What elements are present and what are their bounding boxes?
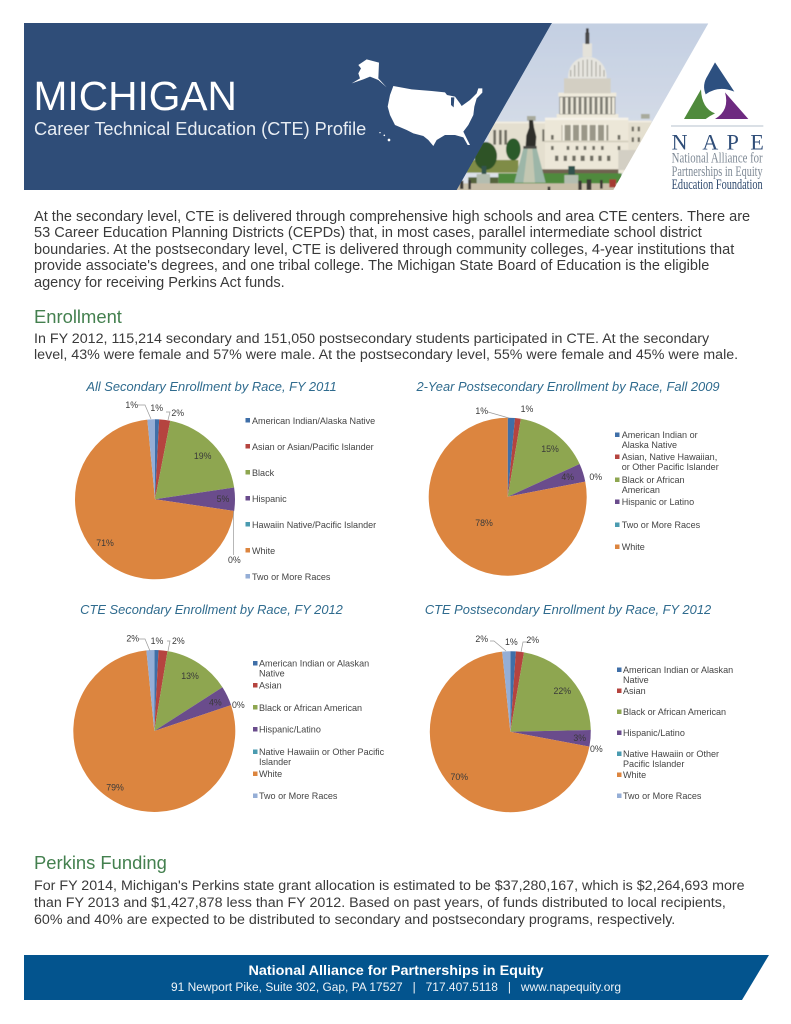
chart: CTE postsecondary enrollment: 1% <box>505 637 518 647</box>
footer band: 91 Newport Pike, Suite 302, Gap, PA 17527 | 717.407.5118 | www.napequity.org <box>171 980 621 994</box>
chart: 2-year postsecondary enrollment: Two or More Races <box>622 520 701 530</box>
chart: all secondary enrollment: 71% <box>96 538 114 548</box>
chart: 2-year postsecondary enrollment: Asian, Native Hawaiian, <box>622 452 717 462</box>
perkins paragraph: For FY 2014, Michigan's Perkins state grant allocation is estimated to be $37,280,167, which is $2,264,693 more <box>34 878 745 894</box>
heading: enrollment: Enrollment <box>34 306 122 327</box>
chart: 2-year postsecondary enrollment: 2-Year Postsecondary Enrollment by Race, Fall 2009 <box>415 379 720 394</box>
chart: CTE secondary enrollment: 2% <box>126 634 139 644</box>
chart: CTE secondary enrollment: White <box>259 769 282 779</box>
chart: CTE secondary enrollment: Black or African American <box>259 703 362 713</box>
chart: all secondary enrollment: Black <box>252 468 275 478</box>
chart: CTE postsecondary enrollment: Hispanic/Latino <box>623 728 685 738</box>
logo: NAPE: N <box>672 129 688 154</box>
chart: all secondary enrollment: 0% <box>228 555 241 565</box>
chart: CTE postsecondary enrollment: American Indian or Alaskan <box>623 665 733 675</box>
banner background <box>24 23 552 190</box>
chart: 2-year postsecondary enrollment: White <box>622 542 645 552</box>
chart: CTE postsecondary enrollment <box>425 602 733 812</box>
chart: all secondary enrollment: Asian or Asian/Pacific Islander <box>252 442 374 452</box>
chart: CTE postsecondary enrollment: CTE Postsecondary Enrollment by Race, FY 2012 <box>425 602 711 617</box>
chart: CTE secondary enrollment: 13% <box>181 671 199 681</box>
chart: CTE secondary enrollment: Islander <box>259 757 291 767</box>
intro paragraph: At the secondary level, CTE is delivered through comprehensive high schools and area CTE centers. There are <box>34 209 750 225</box>
enrollment paragraph: In FY 2012, 115,214 secondary and 151,050 postsecondary students participated in CTE. At the secondary <box>34 331 709 347</box>
chart: CTE secondary enrollment: 4% <box>209 698 222 708</box>
chart: all secondary enrollment: 1% <box>125 400 138 410</box>
chart: CTE secondary enrollment: 1% <box>151 636 164 646</box>
chart: CTE secondary enrollment: Native Hawaiin or Other Pacific <box>259 747 385 757</box>
chart: CTE secondary enrollment: Native <box>259 668 285 678</box>
chart: all secondary enrollment: Hispanic <box>252 494 287 504</box>
chart: 2-year postsecondary enrollment: Hispanic or Latino <box>622 497 694 507</box>
intro paragraph: 53 Career Education Planning Districts (CEPDs) that, in most cases, parallel intermediate school district <box>34 225 702 241</box>
chart: CTE secondary enrollment: Hispanic/Latino <box>259 724 321 734</box>
footer band <box>24 955 769 1000</box>
chart: CTE postsecondary enrollment: 3% <box>573 733 586 743</box>
perkins paragraph: 60% and 40% are expected to be distributed to secondary and postsecondary programs, respectively. <box>34 912 675 928</box>
chart: CTE postsecondary enrollment: 22% <box>553 686 571 696</box>
chart: CTE postsecondary enrollment: White <box>623 770 646 780</box>
chart: 2-year postsecondary enrollment: 4% <box>561 472 574 482</box>
intro paragraph: provide associate's degrees, and one tribal college. The Michigan State Board of Education is the eligible <box>34 258 709 274</box>
chart: CTE postsecondary enrollment: Asian <box>623 686 646 696</box>
chart: all secondary enrollment: White <box>252 546 275 556</box>
chart: CTE secondary enrollment: CTE Secondary Enrollment by Race, FY 2012 <box>80 602 343 617</box>
intro paragraph <box>34 209 750 291</box>
chart: 2-year postsecondary enrollment: 15% <box>541 444 559 454</box>
chart: 2-year postsecondary enrollment <box>415 379 720 576</box>
chart: CTE postsecondary enrollment: 0% <box>590 744 603 754</box>
chart: CTE postsecondary enrollment: Native Hawaiin or Other <box>623 749 719 759</box>
chart: 2-year postsecondary enrollment: American Indian or <box>622 430 698 440</box>
chart: CTE postsecondary enrollment: 2% <box>475 634 488 644</box>
chart: CTE secondary enrollment <box>73 602 385 812</box>
chart: all secondary enrollment: 5% <box>217 494 230 504</box>
chart: CTE postsecondary enrollment: Native <box>623 675 649 685</box>
chart: all secondary enrollment <box>75 379 376 582</box>
chart: CTE postsecondary enrollment: Pacific Islander <box>623 759 684 769</box>
heading: perkins funding: Perkins Funding <box>34 852 167 873</box>
chart: CTE secondary enrollment: 0% <box>232 700 245 710</box>
chart: CTE secondary enrollment: American Indian or Alaskan <box>259 658 369 668</box>
chart: all secondary enrollment: Hawaiin Native/Pacific Islander <box>252 520 376 530</box>
footer band: National Alliance for Partnerships in Equity <box>248 963 544 978</box>
chart: CTE secondary enrollment: Two or More Races <box>259 791 338 801</box>
chart: CTE postsecondary enrollment: 70% <box>450 772 468 782</box>
title: MICHIGAN <box>34 73 237 119</box>
chart: all secondary enrollment: 19% <box>194 451 212 461</box>
chart: 2-year postsecondary enrollment: or Other Pacific Islander <box>622 462 719 472</box>
perkins paragraph <box>34 878 745 928</box>
chart: 2-year postsecondary enrollment: Alaska Native <box>622 440 677 450</box>
chart: CTE secondary enrollment: Asian <box>259 680 282 690</box>
photo: US Capitol <box>453 20 713 193</box>
chart: 2-year postsecondary enrollment: 1% <box>475 406 488 416</box>
subtitle: Career Technical Education (CTE) Profile <box>34 119 366 139</box>
logo: NAPE: P <box>727 129 739 154</box>
intro paragraph: boundaries. At the postsecondary level, CTE is delivered through community colleges, 4-year institutions that <box>34 242 734 258</box>
logo: NAPE: E <box>750 129 764 154</box>
intro paragraph: agency for receiving Perkins Act funds. <box>34 275 285 291</box>
chart: CTE secondary enrollment: 2% <box>172 636 185 646</box>
chart: 2-year postsecondary enrollment: American <box>622 485 660 495</box>
logo: NAPE: A <box>702 129 718 154</box>
chart: CTE postsecondary enrollment: Black or African American <box>623 707 726 717</box>
chart: CTE postsecondary enrollment: Two or More Races <box>623 791 702 801</box>
chart: 2-year postsecondary enrollment: 1% <box>521 404 534 414</box>
chart: all secondary enrollment: 2% <box>171 408 184 418</box>
chart: 2-year postsecondary enrollment: 0% <box>589 472 602 482</box>
chart: CTE postsecondary enrollment: 2% <box>526 635 539 645</box>
chart: 2-year postsecondary enrollment: Black or African <box>622 475 685 485</box>
chart: all secondary enrollment: All Secondary Enrollment by Race, FY 2011 <box>85 379 337 394</box>
icon: US map <box>352 59 482 146</box>
chart: all secondary enrollment: American Indian/Alaska Native <box>252 416 375 426</box>
enrollment paragraph: level, 43% were female and 57% were male. At the postsecondary level, 55% were female and 45% were male. <box>34 347 738 363</box>
chart: all secondary enrollment: Two or More Races <box>252 572 331 582</box>
enrollment paragraph <box>34 331 738 363</box>
logo: NAPE <box>671 62 764 193</box>
header banner <box>24 23 764 193</box>
perkins paragraph: than FY 2013 and $1,427,878 less than FY 2012. Based on past years, of funds distributed to local recipients, <box>34 895 726 911</box>
chart: 2-year postsecondary enrollment: 78% <box>475 518 493 528</box>
chart: CTE secondary enrollment: 79% <box>106 782 124 792</box>
chart: all secondary enrollment: 1% <box>150 403 163 413</box>
dome <box>557 28 618 119</box>
